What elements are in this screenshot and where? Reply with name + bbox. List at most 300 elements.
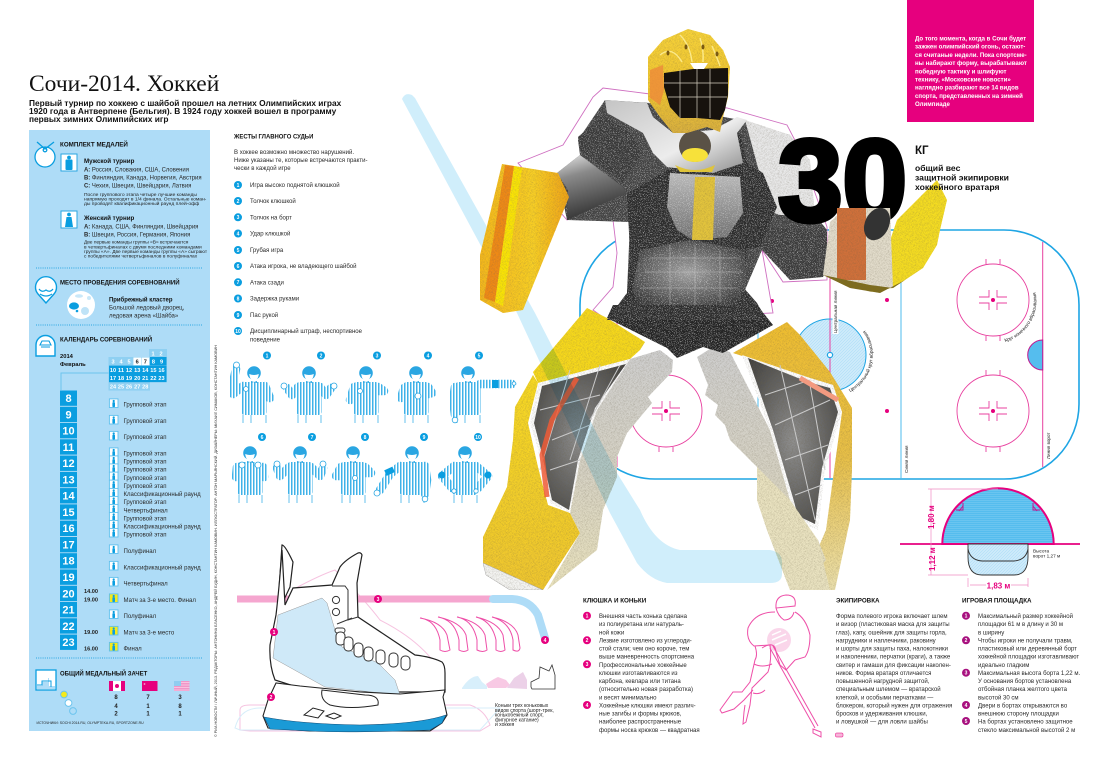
medal markers [61, 691, 76, 714]
schedule events: Групповой этап [124, 418, 167, 425]
calendar grid: 7 [144, 360, 147, 366]
subtitle: 1920 года в Антверпене (Бельгия). В 1924 году хоккей вошел в программу [29, 106, 337, 116]
panel: referee gestures text: Дисциплинарный штраф, неспортивное [250, 328, 363, 335]
panel: rink text: У основания бортов установлена [978, 679, 1072, 685]
calendar grid: 10 [110, 368, 116, 374]
title: Сочи-2014. Хоккей [29, 71, 220, 97]
calendar grid: 5 [127, 360, 131, 366]
gesture 7 [274, 446, 326, 503]
panel: stick and skates text: ной кожи [599, 629, 624, 636]
gesture numbers: 5 [478, 353, 481, 359]
callout: weight: общий вес [915, 163, 961, 173]
player outline illustration [720, 595, 821, 737]
calendar grid: 21 [142, 376, 148, 382]
panel: rink text: отбойная планка желтого цвета [978, 686, 1068, 693]
callout: intro box: технику, «Московские новости» [915, 76, 1011, 84]
calendar grid: 8 [152, 360, 155, 366]
panel: stick and skates text: КЛЮШКА И КОНЬКИ [583, 598, 647, 604]
panel: rink text: площадки 61 м в длину и 30 м [978, 622, 1063, 628]
source: ИСТОЧНИКИ: SOCHI 2014.RU, OLYMPTEKA.RU, SPORTZONE.RU [36, 721, 144, 725]
panel: stick and skates text: из полиуретана или натураль- [599, 622, 684, 628]
schedule events: Групповой этап [124, 532, 167, 539]
medal numbers: 8 [178, 704, 182, 710]
right pad quilting [765, 365, 830, 520]
goal dimensions diagram: 1,80 м [927, 505, 936, 529]
men tournament text: Мужской турнир [84, 158, 135, 165]
flag: Canada [109, 681, 125, 691]
schedule events: Классификационный раунд [124, 524, 201, 531]
subtitle: Первый турнир по хоккею с шайбой прошел на летних Олимпийских играх [29, 98, 342, 108]
panel: referee gestures text: Ниже указаны те, которые встречаются практи- [234, 158, 368, 164]
schedule dates: 20 [62, 588, 75, 600]
calendar grid: 20 [134, 376, 140, 382]
schedule events: Классификационный раунд [124, 491, 201, 498]
schedule dates: 10 [62, 426, 75, 438]
goalie illustration [483, 29, 852, 590]
rink labels: Центральный круг вбрасывания [848, 330, 874, 392]
skate badges: 1 [273, 630, 276, 636]
panel: rink text: 2 [965, 638, 968, 644]
callout: intro box: зажжен олимпийский огонь, остают- [915, 44, 1025, 51]
icon: podium [36, 670, 56, 690]
gesture numbers: 7 [311, 435, 314, 441]
panel: stick and skates text: стой стали; чем оно короче, тем [599, 646, 689, 652]
venue text [109, 296, 185, 320]
match times: 16.00 [84, 646, 98, 652]
gesture numbers: 9 [423, 435, 426, 441]
icon: woman [61, 211, 77, 228]
schedule events: Групповой этап [124, 434, 167, 441]
panel: referee gestures text: Задержка руками [250, 297, 299, 303]
flag: China [142, 681, 158, 691]
goal dimensions diagram: ворот 1,27 м [1033, 554, 1060, 558]
skate caption: Коньки трех коньковых [495, 703, 549, 709]
panel: rink text: На бортах установлено защитное [978, 720, 1073, 726]
venue text: ледовая арена «Шайба» [109, 312, 179, 320]
calendar grid: 24 [110, 384, 117, 390]
blue stick blade [493, 599, 545, 638]
medal numbers [114, 695, 182, 718]
blade [264, 715, 446, 732]
panel: referee gestures text: 9 [237, 313, 240, 319]
panel: referee gestures text: Атака сзади [250, 280, 284, 286]
puck [859, 204, 895, 244]
panel: referee gestures text [233, 134, 368, 343]
panel: referee gestures text: 2 [237, 199, 240, 205]
panel: stick and skates text: наиболее распространенные [599, 720, 682, 726]
panel: stick and skates text: Хоккейные клюшки имеют различ- [599, 702, 696, 709]
medal numbers: 7 [146, 695, 150, 701]
panel: equipment text: блокером, который нужен для отражения [836, 702, 952, 709]
panel: rink text: внешнюю сторону площадки [978, 712, 1059, 718]
panel: rink text: ИГРОВАЯ ПЛОЩАДКА [962, 598, 1032, 604]
panel: stick and skates text: 4 [586, 703, 589, 709]
calendar grid: 23 [158, 376, 165, 382]
heading: medal table: ОБЩИЙ МЕДАЛЬНЫЙ ЗАЧЕТ [60, 670, 148, 678]
panel: equipment text: ЭКИПИРОВКА [836, 598, 880, 604]
gesture 3 [350, 366, 384, 423]
small skates [462, 665, 555, 689]
calendar grid: 11 [118, 368, 124, 374]
calendar grid: 3 [111, 360, 115, 366]
goal dimensions diagram: 1,83 м [987, 582, 1010, 590]
match times: 19.00 [84, 598, 98, 604]
schedule dates: 21 [62, 604, 75, 616]
panel: referee gestures text: Пас рукой [250, 312, 278, 319]
schedule dates: 12 [62, 458, 75, 470]
gesture numbers: 6 [261, 435, 264, 441]
callout: intro box: До того момента, когда в Сочи будет [915, 36, 1026, 42]
big number 30: 30 [778, 116, 907, 246]
calendar grid: 16 [158, 368, 165, 374]
callout: intro box: наглядно разбирают все 14 видов [915, 85, 1019, 92]
men tournament text [84, 158, 207, 207]
callout: intro box: Олимпиаде [915, 101, 950, 108]
dimension lines [928, 489, 1028, 587]
schedule events: Групповой этап [124, 483, 167, 490]
rink labels: Синяя линия [904, 445, 909, 473]
panel: stick and skates text: выше маневренность спортсмена [599, 655, 695, 661]
rink diagram [579, 229, 1080, 480]
skate caption: и хоккея [495, 722, 515, 728]
rink labels [832, 290, 1051, 473]
abdomen [632, 240, 745, 305]
heading: medals: КОМПЛЕКТ МЕДАЛЕЙ [60, 140, 128, 148]
match times: 19.00 [84, 630, 98, 636]
men tournament text: B: Финляндия, Канада, Норвегия, Австрия [84, 176, 202, 182]
panel: referee gestures text: Толчок клюшкой [250, 198, 296, 205]
medal numbers: 1 [146, 712, 150, 718]
upper body base [557, 100, 827, 320]
panel: equipment text: нагрудники и наплечники, раковину [836, 638, 937, 644]
ghost skates [235, 570, 500, 731]
calendar grid: 18 [118, 376, 124, 382]
panel: referee gestures text: 6 [237, 264, 240, 270]
women tournament text [83, 215, 208, 260]
calendar grid: 6 [136, 360, 139, 366]
callout: weight: хоккейного вратаря [915, 182, 999, 192]
calendar grid: 14 [142, 368, 149, 374]
skate caption: фигурное катание) [495, 717, 539, 723]
schedule dates: 23 [62, 637, 75, 649]
schedule icons [109, 399, 118, 651]
medal numbers: 4 [114, 704, 118, 710]
neck glow [675, 130, 715, 172]
panel: stick and skates text: 1 [586, 614, 589, 620]
schedule events: Групповой этап [124, 467, 167, 474]
callout: intro box [907, 0, 1034, 122]
gesture numbers: 4 [427, 353, 430, 359]
left shoulder pad [578, 115, 643, 183]
panel: referee gestures text: Грубая игра [250, 248, 284, 254]
gesture numbers: 8 [364, 435, 367, 441]
stick hooks [420, 617, 520, 652]
calendar grid: 22 [150, 376, 157, 382]
women tournament text: в четвертьфиналах с двумя последними командами [84, 244, 202, 250]
calendar grid: 19 [126, 376, 132, 382]
icon: venue pin [36, 277, 56, 303]
left pad quilting [540, 365, 620, 470]
rink labels: Круг конечного вбрасывания [1004, 292, 1036, 342]
callout: weight: КГ [915, 145, 929, 157]
panel: rink text: 5 [965, 719, 968, 725]
panel: sidebar [29, 130, 210, 731]
torso [607, 133, 777, 320]
blocker glove [480, 164, 569, 313]
panel: stick and skates text: и весят минимально [599, 695, 657, 701]
calendar grid: 17 [110, 376, 116, 382]
callout: weight: защитной экипировки [915, 172, 1009, 182]
panel: stick and skates text: 2 [586, 638, 589, 644]
venue text: Прибрежный кластер [109, 296, 173, 304]
panel: equipment text: ников. Форма вратаря отличается [836, 671, 931, 677]
panel: equipment text: и наколенники, перчатки (краги), а также [836, 655, 951, 661]
skate badges: 4 [544, 638, 547, 644]
callout: intro box: ны набирают форму, вырабатывают [915, 60, 1027, 67]
schedule events: Групповой этап [124, 475, 167, 482]
panel: equipment text: и ловушкой — для ловли шайбы [836, 719, 928, 726]
men tournament text: A: Россия, Словакия, США, Словения [84, 168, 189, 174]
panel: stick and skates text: 3 [586, 662, 589, 668]
map: coastal cluster [67, 291, 95, 319]
calendar grid: 27 [134, 384, 140, 390]
women tournament text: Две первые команды группы «В» встречаются [84, 240, 189, 246]
schedule dates: 13 [62, 474, 75, 486]
goal dimensions diagram [900, 488, 1080, 590]
schedule events: Финал [124, 647, 142, 653]
panel: equipment text: и визор (пластиковая маска для защиты [836, 622, 950, 628]
schedule events: Полуфинал [124, 614, 157, 620]
panel: rink text: хоккейной площадки изготавливают [978, 654, 1079, 661]
skate badges: 3 [377, 597, 380, 603]
panel: rink text: 4 [965, 703, 968, 709]
gesture 1 [233, 362, 270, 423]
panel: referee gestures text: 5 [237, 248, 240, 254]
heading: calendar: КАЛЕНДАРЬ СОРЕВНОВАНИЙ [60, 336, 152, 344]
calendar grid: 28 [142, 384, 148, 390]
panel: referee gestures text: Игра высоко поднятой клюшкой [250, 182, 340, 189]
calendar grid: 2 [159, 352, 163, 358]
panel: equipment text: специальным шлемом — вратарской [836, 686, 941, 693]
calendar grid: 1 [151, 352, 155, 358]
schedule events: Четвертьфинал [124, 508, 168, 514]
panel: referee gestures text: 4 [237, 231, 240, 237]
women tournament text: Женский турнир [83, 215, 135, 222]
panel: rink text: стекло максимальной высотой 2 м [978, 727, 1075, 734]
schedule dates: 15 [62, 507, 75, 519]
panel: rink text: в ширину [978, 630, 1005, 636]
panel: stick and skates text: карбона, кевлара или титана [599, 679, 681, 685]
men tournament text: напрямую проходят в 1/4 финала. Остальные коман- [84, 196, 207, 202]
gesture 2 [281, 366, 337, 423]
schedule dates: 14 [62, 491, 75, 503]
icon: medal [35, 142, 55, 167]
panel: equipment text: Форма полевого игрока включает шлем [836, 614, 948, 620]
left leg pad [483, 308, 673, 590]
panel: equipment text: бросков и удерживания клюшки, [836, 712, 928, 718]
schedule events: Групповой этап [124, 458, 167, 466]
women tournament text: группы «А». Две первые команды группы «А» сыграют [84, 249, 208, 255]
pink stick shaft [237, 596, 493, 602]
calendar grid: 25 [118, 384, 124, 390]
match times: 14.00 [84, 589, 98, 595]
panel: stick and skates text [583, 598, 700, 734]
skate caption: конькобежный спорт, [495, 712, 544, 719]
schedule events: Четвертьфинал [124, 582, 168, 588]
rink labels: Линия ворот [1046, 432, 1051, 459]
panel: rink text: Двери в бортах открываются во [978, 703, 1068, 709]
goal crease [1028, 340, 1043, 370]
skate illustration [235, 545, 555, 732]
gesture numbers: 2 [320, 353, 323, 359]
right leg pad [697, 322, 852, 590]
panel: referee gestures text: 7 [237, 280, 240, 286]
gesture numbers: 3 [376, 353, 379, 359]
schedule dates [60, 390, 77, 650]
panel: rink text: 1 [965, 614, 968, 620]
venue text: Большой ледовый дворец, [109, 304, 185, 312]
calendar grid: 15 [150, 368, 157, 374]
panel: referee gestures text: 1 [237, 183, 240, 189]
flag: USA [174, 681, 190, 691]
gesture numbers: 10 [475, 435, 481, 441]
gesture 5 [452, 366, 516, 423]
icon: man [61, 154, 77, 171]
goal dimensions diagram: Высота [1033, 548, 1049, 554]
hockey stick background [402, 94, 782, 583]
women tournament text: B: Швеция, Россия, Германия, Япония [84, 232, 190, 238]
schedule dates: 8 [65, 393, 72, 405]
panel: referee gestures text: 8 [237, 296, 240, 302]
medal numbers: 1 [178, 712, 182, 718]
credits: © РИА НОВОСТИ / ЛИЧНЫЙ, 2013. РЕДАКТОРЫ: АНТОНИНА БЛАСЕНКО, АНДРЕЙ БУДИН, КОНСТАНТИН КАМОВИН. ИЛЛЮСТРАТОР: АНТОН МАРЬЯНСКИЙ. ДИЗАЙНЕРЫ: МИХАИЛ СИМАКОВ, КОНСТАНТИН КАМОВИН [213, 345, 218, 737]
panel: equipment text: клеткой, и особыми перчатками — [836, 694, 934, 701]
skate badges [267, 595, 549, 701]
callout: intro box: ся считаные недели. Пока спортсме- [915, 52, 1027, 59]
medal numbers: 2 [114, 712, 118, 718]
schedule dates: 18 [62, 556, 75, 568]
panel: referee gestures text: Толчок на борт [250, 216, 292, 222]
schedule events: Групповой этап [124, 516, 167, 522]
match times [84, 589, 98, 652]
blade holder [263, 683, 447, 731]
schedule events: Классификационный раунд [124, 564, 201, 571]
subtitle: первых зимних Олимпийских игр [29, 114, 168, 124]
panel: stick and skates text: (относительно новая разработка) [599, 687, 693, 693]
goalie silhouette outline [518, 88, 827, 320]
panel: rink text [962, 598, 1080, 734]
goal net [968, 544, 1028, 575]
schedule events: Матч за 3-е место. Финал [124, 598, 196, 604]
panel: rink text: пластиковый или деревянный борт [978, 646, 1077, 652]
panel: stick and skates text: Профессиональные хоккейные [599, 662, 687, 669]
right shoulder [745, 120, 815, 215]
schedule dates: 22 [62, 621, 75, 633]
callout: weight [915, 145, 1009, 192]
referee figures row 1 and 2 [233, 352, 516, 503]
panel: referee gestures text: ЖЕСТЫ ГЛАВНОГО СУДЬИ [233, 134, 313, 140]
schedule events: Матч за 3-е место [124, 630, 175, 636]
panel: rink text: 3 [965, 670, 968, 676]
panel: stick and skates text: формы носка крюков — квадратная [599, 728, 700, 734]
medal numbers: 8 [114, 695, 118, 701]
schedule events: Групповой этап [124, 450, 167, 457]
goal dimensions diagram: 1,12 м [928, 547, 937, 571]
callout: intro box: победную тактику и шлифуют [915, 68, 1007, 75]
panel: equipment text: повышенной нагрудной защитой, [836, 678, 930, 685]
panel: stick and skates text: ные загибы и формы крюков, [599, 712, 682, 718]
schedule dates: 17 [62, 540, 75, 552]
chest plate [667, 173, 743, 240]
panel: referee gestures text: Удар клюшкой [250, 231, 290, 238]
panel: referee gestures text: поведение [250, 337, 281, 343]
panel: stick and skates text: Лезвие изготовлено из углероди- [599, 638, 692, 644]
year and month: 2014 [60, 354, 74, 360]
faceoff circles [630, 259, 1029, 452]
collar [605, 100, 747, 173]
panel: equipment text: и шорты для защиты паха, налокотники [836, 646, 948, 652]
year and month: Февраль [60, 362, 86, 368]
schedule dates: 19 [62, 572, 75, 584]
schedule events [124, 402, 201, 653]
panel: rink text: идеально гладким [978, 663, 1029, 669]
panel: referee gestures text: 3 [237, 215, 240, 221]
panel: referee gestures text: Атака игрока, не владеющего шайбой [250, 263, 357, 270]
callout: intro box: спорта, представленных на зимней [915, 93, 1023, 100]
hips [607, 305, 773, 358]
schedule events: Полуфинал [124, 549, 157, 555]
panel: equipment text: глаз), капу, ошейник для защиты горла, [836, 629, 947, 636]
panel: referee gestures text: 10 [235, 329, 241, 335]
calendar grid: 12 [126, 368, 132, 374]
schedule events: Групповой этап [124, 402, 167, 409]
right arm [760, 227, 827, 280]
medal numbers: 1 [146, 704, 150, 710]
left arm [557, 155, 627, 220]
helmet [648, 29, 730, 133]
calendar grid: 13 [134, 368, 140, 374]
men tournament text: C: Чехия, Швеция, Швейцария, Латвия [84, 182, 191, 190]
rink labels: Центральная линия [833, 290, 838, 333]
gesture 10 [438, 446, 492, 503]
heading: venue: МЕСТО ПРОВЕДЕНИЯ СОРЕВНОВАНИЙ [60, 278, 180, 286]
panel: rink text: Максимальный размер хоккейной [978, 613, 1073, 620]
gesture 4 [401, 366, 432, 423]
gesture numbers [258, 352, 483, 441]
skate caption: видов спорта (шорт-трек, [495, 708, 554, 714]
medal numbers: 3 [178, 695, 182, 701]
panel: stick and skates text: Внешняя часть конька сделана [599, 614, 688, 620]
men tournament text: ды проводят квалификационный раунд плей-офф [84, 200, 199, 207]
boot panel [273, 598, 400, 695]
boot [270, 545, 445, 692]
skate badges: 2 [270, 695, 273, 701]
schedule dates: 9 [65, 409, 72, 421]
gesture 8 [336, 446, 371, 503]
calendar grid: 9 [160, 360, 163, 366]
eyelets and laces [332, 586, 410, 670]
schedule events: Групповой этап [124, 499, 167, 506]
panel: rink text: Максимальная высота борта 1,22 м. [978, 671, 1080, 677]
schedule dates: 11 [63, 442, 74, 454]
gesture numbers: 1 [266, 353, 269, 359]
icon: calendar [36, 336, 55, 356]
panel: rink text: Чтобы игроки не получали травм, [978, 638, 1073, 644]
panel: equipment text [836, 598, 952, 737]
schedule dates: 16 [62, 523, 75, 535]
center circle [794, 319, 866, 391]
calendar grid: 26 [126, 384, 132, 390]
